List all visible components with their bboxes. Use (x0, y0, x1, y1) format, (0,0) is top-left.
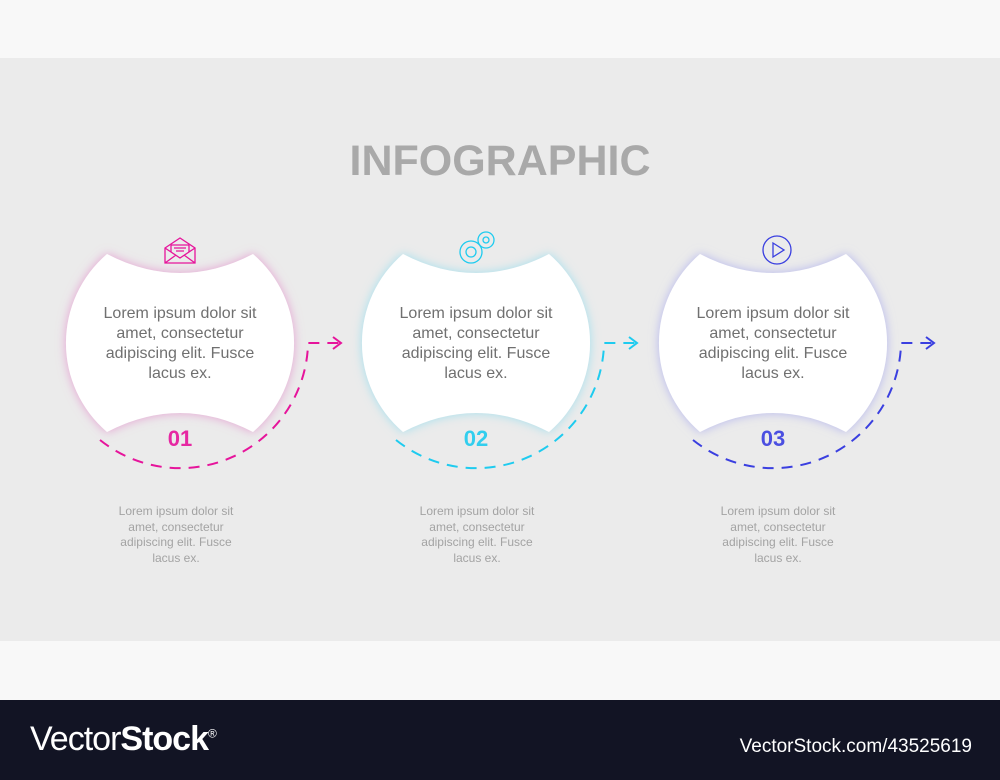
icon: envelope (165, 238, 195, 263)
dashed arrow 2 (396, 337, 637, 468)
number 01: 01 (168, 426, 192, 451)
logo: VectorStock® (30, 720, 216, 758)
number 02: 02 (464, 426, 488, 451)
caption 3: Lorem ipsum dolor sit amet, consectetur adipiscing elit. Fusce lacus ex. (721, 504, 835, 564)
icon: play (763, 236, 791, 264)
icon: gears (460, 232, 494, 263)
card text 1: Lorem ipsum dolor sit amet, consectetur adipiscing elit. Fusce lacus ex. (104, 305, 256, 382)
card text 2: Lorem ipsum dolor sit amet, consectetur adipiscing elit. Fusce lacus ex. (400, 305, 552, 382)
background panel (0, 58, 1000, 641)
card text 3: Lorem ipsum dolor sit amet, consectetur adipiscing elit. Fusce lacus ex. (697, 305, 849, 382)
number 03: 03 (761, 426, 785, 451)
step 2 (362, 232, 637, 468)
footer (0, 700, 1000, 780)
caption 2: Lorem ipsum dolor sit amet, consectetur adipiscing elit. Fusce lacus ex. (420, 504, 534, 564)
card 2 (362, 254, 590, 432)
step 1 (66, 238, 341, 468)
caption 1: Lorem ipsum dolor sit amet, consectetur adipiscing elit. Fusce lacus ex. (119, 504, 233, 564)
dashed arrow 3 (693, 337, 934, 468)
card 3 (659, 254, 887, 432)
title: INFOGRAPHIC (350, 137, 650, 185)
dashed arrow 1 (100, 337, 341, 468)
card 1 (66, 254, 294, 432)
url: VectorStock.com/43525619 (740, 736, 972, 757)
step 3 (659, 236, 934, 468)
